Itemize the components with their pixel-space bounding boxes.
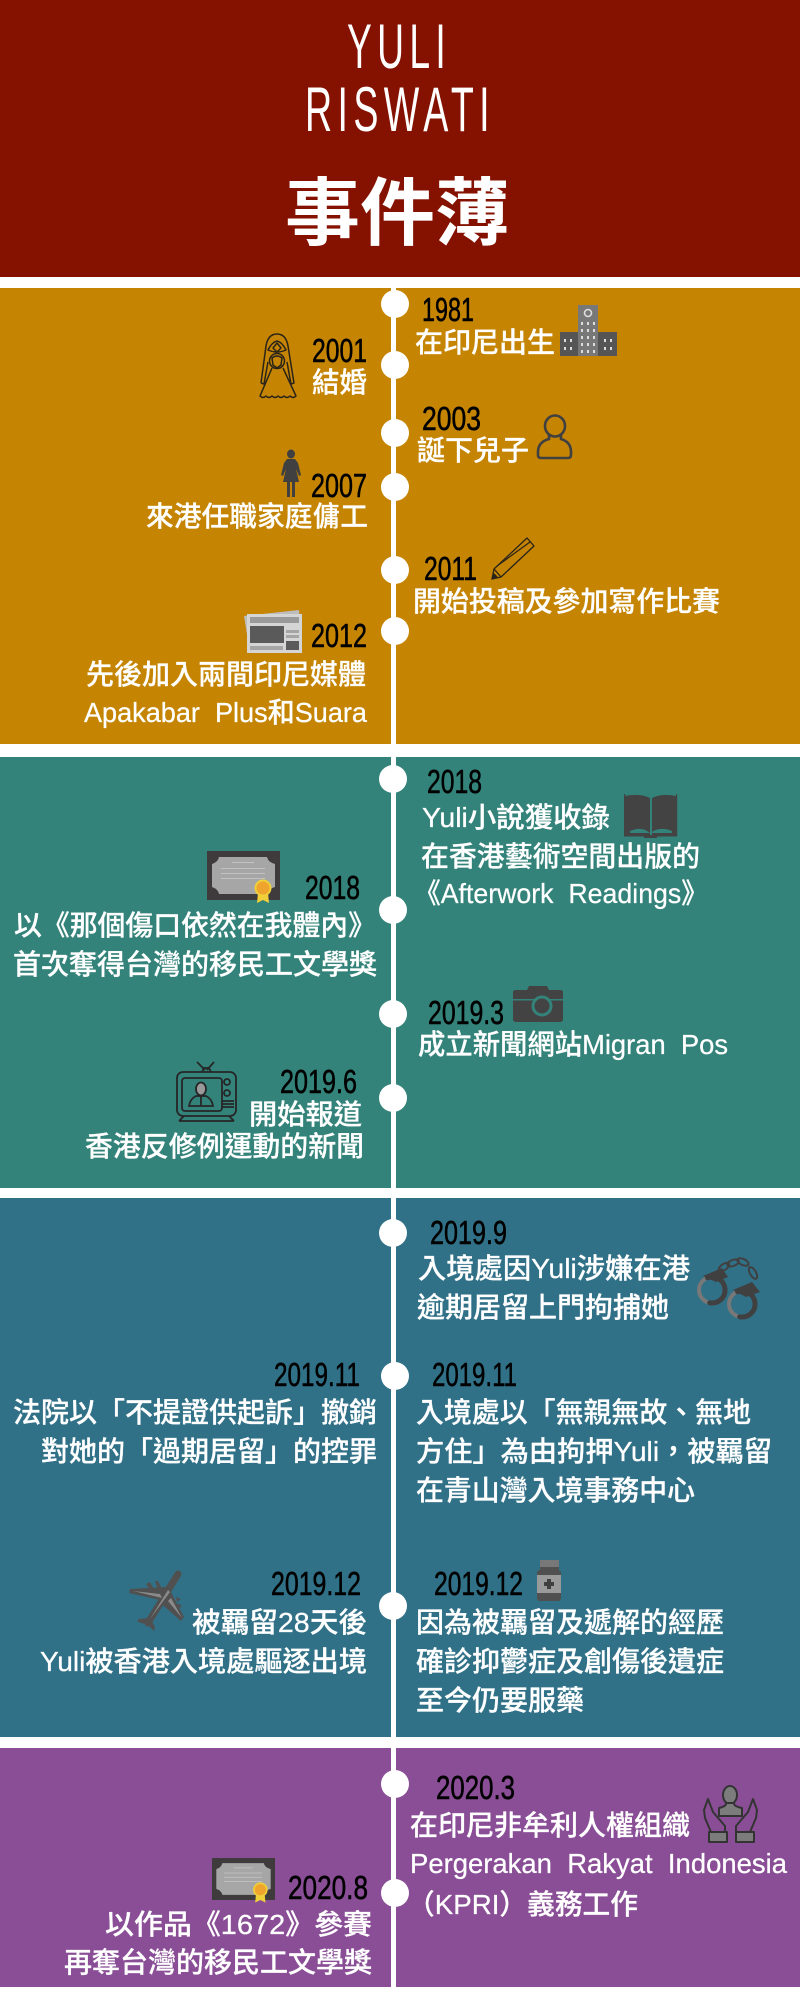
event: 2020.8: 再奪台灣的移民工文學獎 bbox=[64, 1947, 372, 1978]
event: 2019.12 deport: 被羈留28天後 bbox=[192, 1607, 367, 1638]
event: 2018 award bbox=[13, 869, 377, 980]
event: 2011: 2011 bbox=[424, 550, 477, 587]
event: 2019.11 detention: 2019.11 bbox=[432, 1356, 517, 1393]
icon: bride bbox=[260, 334, 296, 398]
event: 2019.9: 逾期居留上門拘捕她 bbox=[417, 1292, 669, 1323]
event: 2019.12 deport bbox=[40, 1565, 367, 1677]
title: name line one: YULI bbox=[347, 12, 451, 82]
event: 2011 bbox=[413, 550, 720, 617]
icon: pencil bbox=[492, 538, 534, 579]
event: 2019.12 medication: 2019.12 bbox=[434, 1565, 523, 1602]
event: 2018 award: 以《那個傷口依然在我體內》 bbox=[14, 910, 376, 941]
event: 2019.12 medication: 確診抑鬱症及創傷後遺症 bbox=[416, 1646, 724, 1677]
event: 2018 novel: Yuli小說獲收錄 bbox=[422, 802, 610, 833]
event: 2020.3: 2020.3 bbox=[436, 1769, 515, 1806]
panel: gold section background bbox=[0, 288, 800, 744]
event: 2012: Apakabar Plus和Suara bbox=[84, 697, 367, 728]
event: 2018 award: 首次奪得台灣的移民工文學獎 bbox=[13, 949, 377, 980]
title: name line two: RISWATI bbox=[305, 75, 495, 145]
event: 2003 bbox=[417, 400, 529, 466]
event: 2003: 2003 bbox=[422, 400, 481, 437]
event: 2020.8: 2020.8 bbox=[288, 1869, 368, 1906]
event: 2012: 先後加入兩間印尼媒體 bbox=[86, 659, 366, 690]
event: 2019.6 bbox=[85, 1063, 364, 1162]
event: 2019.3: 2019.3 bbox=[428, 994, 504, 1031]
panel: purple section background bbox=[0, 1748, 800, 1987]
event: 2018 novel: 2018 bbox=[427, 763, 482, 800]
event: 2007: 來港任職家庭傭工 bbox=[146, 501, 368, 532]
event: 2019.12 medication: 因為被羈留及遞解的經歷 bbox=[416, 1607, 724, 1638]
icon: television bbox=[177, 1062, 236, 1121]
event: 2019.12 deport: Yuli被香港入境處驅逐出境 bbox=[40, 1646, 367, 1677]
event: 2012 bbox=[84, 617, 367, 728]
timeline spine with dots bbox=[379, 277, 409, 1987]
event: 2019.12 medication bbox=[416, 1565, 724, 1716]
event: 2020.3 bbox=[407, 1769, 787, 1920]
event: 2020.8: 以作品《1672》參賽 bbox=[105, 1909, 372, 1940]
event: 2019.11 detention: 入境處以「無親無故、無地 bbox=[416, 1397, 751, 1428]
event: 2020.3: （KPRI）義務工作 bbox=[407, 1889, 638, 1920]
event: 2019.11 court: 法院以「不提證供起訴」撤銷 bbox=[13, 1397, 377, 1428]
event: 2019.6: 香港反修例運動的新聞 bbox=[85, 1131, 364, 1162]
event: 2018 novel bbox=[414, 763, 708, 909]
event: 2019.11 detention: 方住」為由拘押Yuli，被羈留 bbox=[416, 1436, 772, 1467]
event: 2019.11 detention: 在青山灣入境事務中心 bbox=[416, 1475, 695, 1506]
event: 2019.12 deport: 2019.12 bbox=[271, 1565, 361, 1602]
event: 2018 award: 2018 bbox=[305, 869, 360, 906]
event: 2019.9 bbox=[417, 1214, 690, 1323]
icon: buildings bbox=[560, 305, 617, 356]
event: 2019.11 detention bbox=[416, 1356, 772, 1506]
event: 2012: 2012 bbox=[311, 617, 367, 654]
icon: handcuffs bbox=[699, 1257, 760, 1317]
icon: certificate 2020 bbox=[212, 1858, 275, 1903]
header panel bbox=[0, 0, 800, 277]
event: 2019.3 bbox=[418, 994, 728, 1060]
event: 2020.3: 在印尼非牟利人權組織 bbox=[410, 1810, 690, 1841]
event: 2019.11 court: 對她的「過期居留」的控罪 bbox=[41, 1436, 377, 1467]
event: 2020.8 bbox=[64, 1869, 372, 1978]
event: 2019.6: 開始報道 bbox=[249, 1099, 362, 1130]
event: 2007 bbox=[146, 467, 368, 532]
event: 2019.3: 成立新聞網站Migran Pos bbox=[418, 1029, 728, 1060]
icon: newspaper bbox=[244, 610, 302, 653]
event: 2011: 開始投稿及參加寫作比賽 bbox=[413, 586, 720, 617]
event: 2020.3: Pergerakan Rakyat Indonesia bbox=[410, 1848, 787, 1879]
icon: certificate bbox=[207, 851, 280, 903]
event: 2019.11 court: 2019.11 bbox=[274, 1356, 360, 1393]
event: 2003: 誕下兒子 bbox=[417, 435, 529, 466]
event: 2001 bbox=[312, 332, 367, 398]
event: 1981: 1981 bbox=[422, 291, 474, 328]
icon: woman bbox=[281, 450, 301, 497]
panel: teal section background bbox=[0, 757, 800, 1188]
title: event book: 事件薄 bbox=[285, 172, 510, 255]
event: 1981: 在印尼出生 bbox=[415, 327, 555, 358]
event: 2007: 2007 bbox=[311, 467, 367, 504]
icon: airplane bbox=[129, 1574, 184, 1631]
icon: medicine bottle bbox=[537, 1560, 561, 1601]
event: 2019.9: 2019.9 bbox=[430, 1214, 507, 1251]
event: 2019.9: 入境處因Yuli涉嫌在港 bbox=[418, 1253, 690, 1284]
panel: blue section background bbox=[0, 1198, 800, 1737]
event: 2019.12 medication: 至今仍要服藥 bbox=[416, 1685, 584, 1716]
icon: person outline bbox=[538, 416, 571, 458]
event: 1981 bbox=[415, 291, 555, 358]
icon: open book bbox=[624, 794, 677, 838]
event: 2018 novel: 在香港藝術空間出版的 bbox=[421, 841, 700, 872]
icon: camera bbox=[513, 986, 563, 1022]
event: 2018 novel: 《Afterwork Readings》 bbox=[414, 878, 708, 909]
event: 2001: 結婚 bbox=[312, 367, 367, 398]
event: 2019.6: 2019.6 bbox=[280, 1063, 357, 1100]
event: 2001: 2001 bbox=[312, 332, 367, 369]
event: 2019.11 court bbox=[13, 1356, 377, 1467]
icon: hands protecting person bbox=[704, 1786, 757, 1842]
